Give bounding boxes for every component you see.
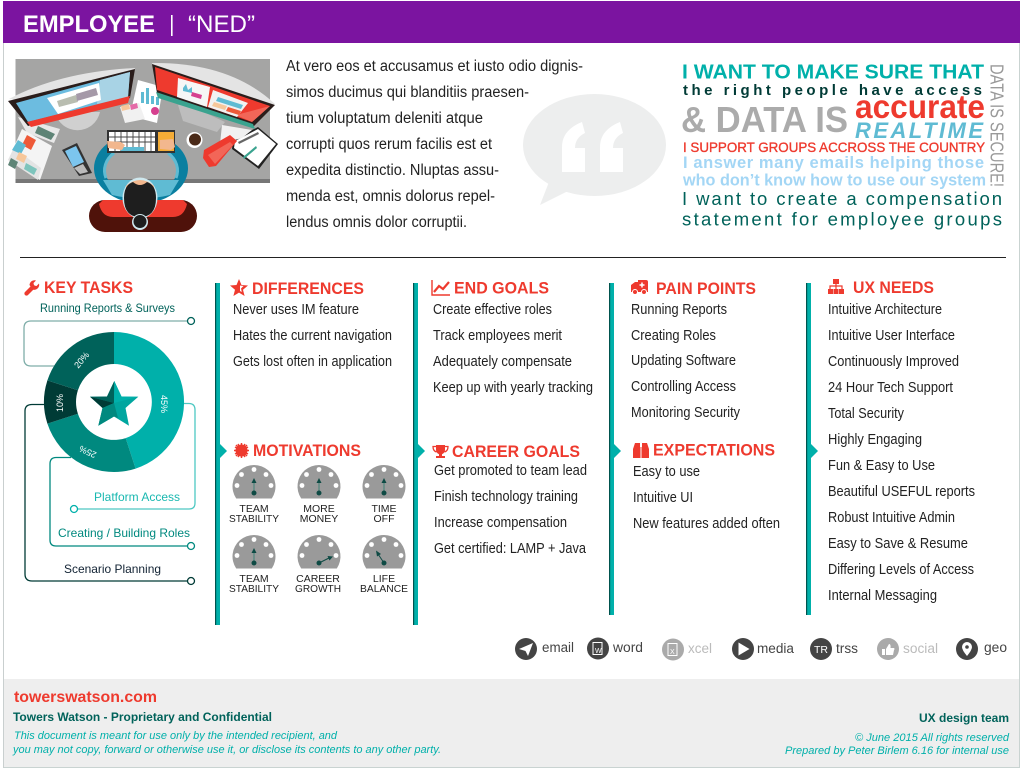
gauge: career growth: GROWTH: [295, 583, 341, 595]
icon: xcel: [662, 638, 712, 660]
donut chart: 45%: [159, 395, 169, 413]
gauge: time off: OFF: [374, 513, 394, 525]
keyboard: [107, 130, 175, 153]
icon: word: W: [595, 648, 602, 655]
donut chart: 25%: [77, 443, 98, 460]
panel: ux needs: 24 Hour Tech Support: [828, 380, 953, 396]
icon: xcel: xcel: [688, 641, 712, 656]
gauge: life balance: BALANCE: [360, 583, 408, 595]
panel: pain points: Creating Roles: [631, 328, 716, 344]
footer: Towers Watson - Proprietary and Confidential: [13, 710, 272, 724]
panel: end goals: [432, 278, 593, 396]
panel: key tasks: KEY TASKS: [44, 278, 133, 297]
footer: [4, 679, 1019, 768]
legend: output types: [515, 638, 1007, 660]
panel: end goals: Adequately compensate: [433, 354, 572, 370]
title banner: [3, 1, 1020, 43]
intro paragraph: lendus omnis dolor corruptii.: [286, 214, 467, 231]
panel: expectations: EXPECTATIONS: [653, 440, 775, 460]
icon: wrench: [24, 280, 39, 296]
icon: geo: geo: [984, 640, 1007, 655]
panel: career goals: Get certified: LAMP + Java: [434, 541, 587, 557]
word cloud quote: statement for employee groups: [682, 208, 1002, 230]
panel: ux needs: Fun & Easy to Use: [828, 458, 935, 474]
icon: email: email: [542, 640, 574, 655]
head: [122, 178, 158, 218]
gauge: team stability 2: STABILITY: [229, 583, 279, 595]
panel: pain points: [631, 279, 756, 421]
intro paragraph: expedita distinctio. Nluptas assu-: [286, 162, 499, 179]
panel: pain points: Running Reports: [631, 302, 727, 318]
gauge: more money: [298, 465, 340, 525]
icon: email: [515, 638, 574, 660]
gauge: team stability 2: [229, 535, 279, 595]
icon: ambulance: [631, 280, 648, 294]
panel: ux needs: Intuitive Architecture: [828, 302, 942, 318]
word cloud quote: I want to create a compensation: [682, 188, 1002, 209]
panel: differences: DIFFERENCES: [252, 279, 364, 298]
icon: trss: [810, 638, 858, 660]
word cloud quote: REALTIME: [855, 118, 984, 143]
connector: scenario planning: [25, 404, 194, 584]
gauge: team stability 2: TEAM: [239, 573, 269, 585]
right monitor: [152, 63, 275, 106]
panel: differences: Gets lost often in application: [233, 354, 392, 370]
icon: sitemap: [828, 279, 844, 294]
panel: career goals: Finish technology training: [434, 489, 578, 505]
illustration: employee at desk from above: [8, 59, 278, 232]
panel: pain points: Monitoring Security: [631, 405, 741, 421]
panel: ux needs: UX NEEDS: [853, 278, 934, 297]
panel: career goals: Get promoted to team lead: [434, 463, 587, 479]
word cloud quote: I answer many emails helping those: [683, 154, 984, 172]
panel: ux needs: Total Security: [828, 406, 905, 422]
icon: media: [732, 638, 794, 660]
panel: key tasks: Running Reports & Surveys: [40, 301, 175, 315]
icon: social: [877, 638, 938, 660]
panel: pain points: Updating Software: [631, 353, 736, 369]
title banner: EMPLOYEE: [23, 11, 155, 38]
panel: motivations: [229, 441, 408, 595]
word cloud quote: who don’t know how to use our system: [682, 172, 986, 190]
gauge: career growth: [295, 535, 341, 595]
word cloud quote: accurate: [855, 88, 985, 125]
icon: quote speech bubble: [523, 94, 666, 205]
documents: [130, 80, 163, 123]
gauge: more money: MONEY: [300, 513, 338, 525]
arms: [99, 148, 183, 198]
icon: word: [587, 638, 643, 660]
title banner: “NED”: [188, 11, 255, 38]
word cloud quote: the right people have access: [683, 82, 982, 99]
panel: ux needs: Beautiful USEFUL reports: [828, 484, 975, 500]
left monitor: [9, 68, 135, 100]
footer: towerswatson.com: [14, 689, 157, 706]
connector: running reports: [24, 318, 194, 366]
icon: burst: [234, 443, 249, 458]
intro paragraph: At vero eos et accusamus et iusto odio dignis-: [286, 58, 583, 75]
intro paragraph: corrupti quos rerum facilis est et: [286, 136, 493, 153]
panel: end goals: Keep up with yearly tracking: [433, 380, 593, 396]
intro paragraph: menda est, omnis dolorus repel-: [286, 188, 495, 205]
icon: star: [90, 381, 138, 426]
gauge: career growth: CAREER: [296, 573, 340, 585]
gauge: team stability: TEAM: [239, 503, 269, 515]
footer: Prepared by Peter Birlem 6.16 for internal use: [785, 745, 1009, 757]
icon: geo: [956, 638, 1007, 660]
donut chart: 20%: [72, 350, 91, 370]
word cloud quote: I WANT TO MAKE SURE THAT: [682, 60, 984, 84]
panel: key tasks: Creating / Building Roles: [58, 526, 190, 540]
panel: ux needs: Robust Intuitive Admin: [828, 510, 955, 526]
icon: trophy: [433, 445, 448, 458]
icon: binoculars: [633, 443, 649, 458]
panel: expectations: [633, 440, 780, 532]
gauge: life balance: LIFE: [373, 573, 395, 585]
panel: career goals: CAREER GOALS: [452, 442, 580, 461]
panel: career goals: Increase compensation: [434, 515, 567, 531]
panel: differences: Hates the current navigation: [233, 328, 392, 344]
panel: key tasks: Scenario Planning: [64, 562, 161, 576]
panel: expectations: Easy to use: [633, 464, 700, 480]
intro paragraph: tium voluptatum deleniti atque: [286, 110, 483, 127]
donut chart: 10%: [55, 394, 65, 412]
panel: end goals: END GOALS: [454, 278, 549, 298]
footer: UX design team: [919, 711, 1009, 725]
panel: pain points: Controlling Access: [631, 379, 736, 395]
word cloud quote: [681, 60, 1006, 230]
panel: key tasks: [24, 278, 195, 584]
panel: ux needs: Differing Levels of Access: [828, 562, 974, 578]
intro paragraph: [286, 58, 583, 231]
panel: ux needs: Highly Engaging: [828, 432, 922, 448]
icon: line chart: [432, 280, 450, 295]
connector: creating roles: [50, 458, 194, 550]
intro paragraph: simos ducimus qui blanditiis praesen-: [286, 84, 529, 101]
panel: ux needs: Easy to Save & Resume: [828, 536, 968, 552]
icon: media: media: [757, 641, 794, 656]
panel: career goals: [433, 442, 587, 557]
word cloud quote: DATA IS SECURE!: [986, 64, 1006, 187]
gauge: more money: MORE: [303, 503, 335, 515]
gauge: team stability: STABILITY: [229, 513, 279, 525]
donut chart: [44, 332, 184, 472]
footer: This document is meant for use only by the intended recipient, and: [14, 730, 338, 742]
gauge: time off: TIME: [371, 503, 397, 515]
icon: social: social: [903, 641, 938, 656]
footer: you may not copy, forward or otherwise use it, or disclose its contents to any other party.: [12, 744, 441, 756]
panel: ux needs: Internal Messaging: [828, 588, 937, 604]
panel: expectations: New features added often: [633, 516, 780, 532]
gauge: life balance: [360, 535, 408, 595]
gauge: time off: [362, 465, 406, 525]
icon: trss: TR: [814, 644, 828, 656]
panel: key tasks: Platform Access: [94, 490, 180, 504]
footer: © June 2015 All rights reserved: [855, 732, 1010, 744]
panel: motivations: MOTIVATIONS: [253, 441, 361, 460]
panel: expectations: Intuitive UI: [633, 490, 693, 506]
panel: pain points: PAIN POINTS: [656, 279, 756, 298]
gauge: team stability: [229, 465, 279, 525]
panel: ux needs: Continuously Improved: [828, 354, 959, 370]
panel: differences: [230, 279, 392, 370]
column divider bars with arrows: [215, 283, 818, 625]
connector: platform access: [70, 404, 195, 512]
word cloud quote: I SUPPORT GROUPS ACCROSS THE COUNTRY: [683, 139, 986, 155]
panel: differences: Never uses IM feature: [233, 302, 359, 318]
icon: xcel: X: [670, 649, 675, 656]
icon: word: word: [612, 640, 643, 655]
chair: [89, 200, 197, 232]
icon: trss: trss: [836, 641, 858, 656]
panel: ux needs: [828, 278, 975, 604]
panel: ux needs: Intuitive User Interface: [828, 328, 955, 344]
word cloud quote: & DATA IS: [681, 99, 848, 140]
icon: star outline: [230, 279, 248, 296]
panel: end goals: Create effective roles: [433, 302, 552, 318]
panel: end goals: Track employees merit: [433, 328, 562, 344]
